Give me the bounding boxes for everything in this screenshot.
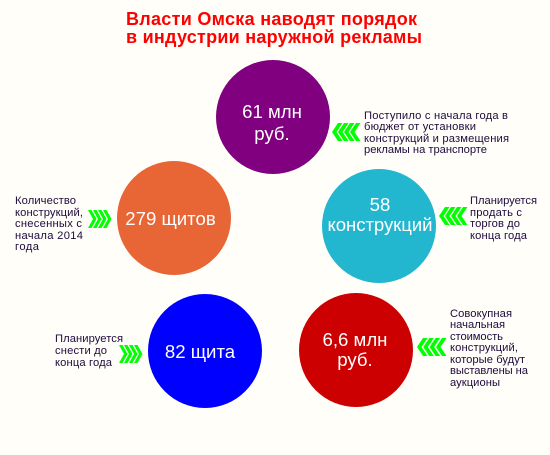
text: planned demolition: конца года [55,357,113,369]
text: sell at auction: Планируется [470,195,537,207]
text: sell at auction: конца года [470,230,528,242]
text: starting cost: выставлены на [450,365,529,377]
circle: 6,6 млн руб.: 6,6 млн [323,329,387,350]
text: planned demolition [55,333,123,369]
text: demolished structures: конструкций, [15,207,83,219]
text: sell at auction: продать с [470,207,522,219]
circle: 58 конструкций: конструкций [328,214,432,235]
circle: 279 щитов: 279 щитов [125,208,216,229]
text: starting cost: которые будут [450,354,525,366]
text: demolished structures: Количество [15,195,76,207]
arrow: sell at auction [439,207,468,225]
text: budget revenue: рекламы на транспорте [364,144,487,156]
arrow: planned demolition [119,345,142,363]
circle: 82 щита: 82 щита [165,341,236,362]
circle: 82 щита [148,294,262,408]
text: budget revenue [364,110,509,156]
arrow: starting cost [417,338,446,356]
text: starting cost: аукционы [450,377,500,389]
circle: 6,6 млн руб. [299,293,413,407]
text: starting cost: Совокупная [450,308,512,320]
circle: 279 щитов [117,161,231,275]
text: budget revenue: бюджет от установки [364,121,476,133]
title: Власти Омска наводят порядок [126,9,418,29]
circle: 61 млн руб.: руб. [254,123,290,144]
text: demolished structures: снесенных с [15,218,82,230]
text: starting cost: стоимость [450,331,503,343]
circle: 61 млн руб.: 61 млн [242,101,302,122]
circle: 61 млн руб. [216,60,330,174]
circle: 58 конструкций: 58 [370,194,390,215]
text: budget revenue: конструкций и размещения [364,133,509,145]
circle: 58 конструкций [322,169,436,283]
text: starting cost: конструкций, [450,342,518,354]
text: starting cost: начальная [450,319,505,331]
text: demolished structures: начала 2014 [15,230,83,242]
text: demolished structures: года [15,241,40,253]
arrow: budget revenue [332,123,360,141]
text: sell at auction: торгов до [470,218,520,230]
text: budget revenue: Поступило с начала года в [364,110,508,122]
text: demolished structures [15,195,83,253]
title [126,9,422,47]
text: planned demolition: снести до [55,345,107,357]
arrow: demolished structures [88,210,112,228]
text: planned demolition: Планируется [55,333,123,345]
text: starting cost [450,308,529,389]
title: в индустрии наружной рекламы [126,27,422,47]
circle: 6,6 млн руб.: руб. [337,349,373,370]
text: sell at auction [470,195,537,242]
